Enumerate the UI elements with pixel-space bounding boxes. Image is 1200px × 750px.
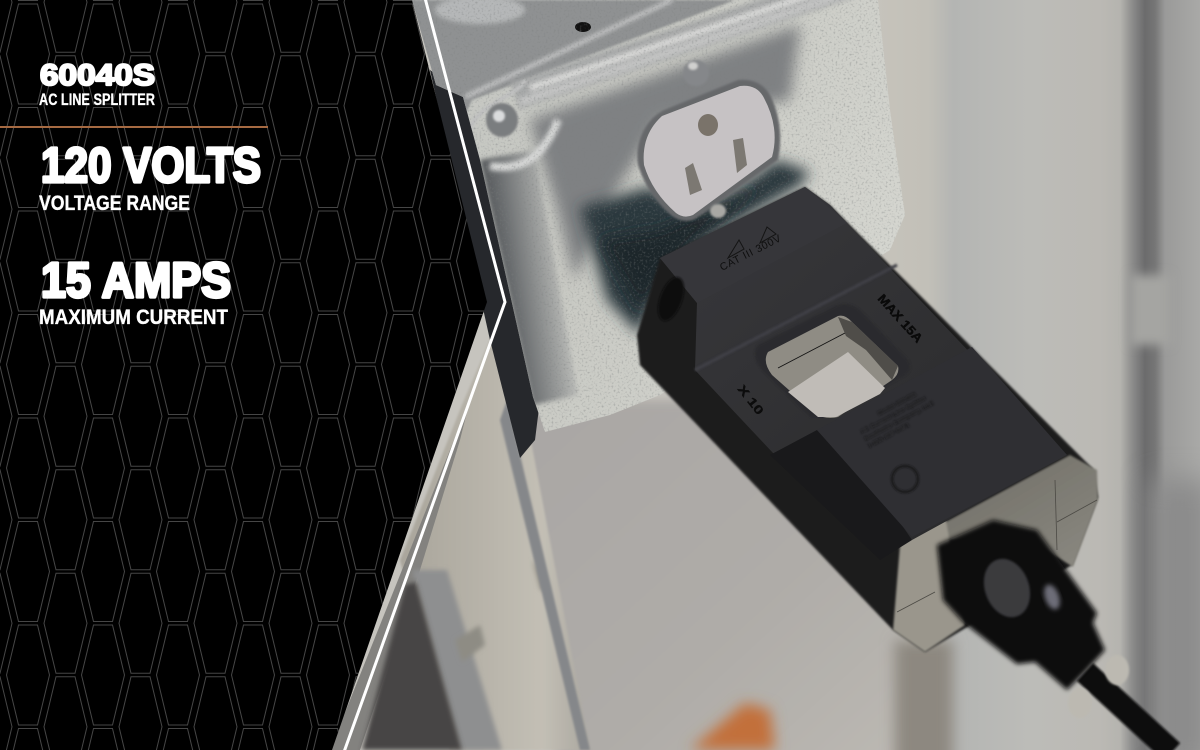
power plug and cord <box>937 520 1172 750</box>
beam edge <box>500 400 590 750</box>
device body <box>637 187 1098 652</box>
galvanized plate <box>432 0 905 432</box>
model heading <box>39 59 155 109</box>
current caption: MAXIMUM CURRENT <box>39 306 228 329</box>
model heading: 60040S <box>40 59 155 92</box>
right slot <box>733 138 747 173</box>
window opening <box>788 352 885 417</box>
dark side block <box>770 430 912 560</box>
lit corner band <box>490 120 558 167</box>
window rim <box>755 304 910 417</box>
beam face <box>400 305 590 750</box>
label small print <box>855 386 940 450</box>
cap seams <box>897 480 1097 612</box>
shadow band <box>412 570 502 750</box>
soot smudge <box>580 160 810 335</box>
label small print: Southwire Company, LLC <box>863 400 936 443</box>
plug body <box>937 520 1105 690</box>
voltage spec <box>39 139 261 215</box>
shaded center of plate <box>530 25 800 280</box>
inner metal wall <box>480 150 578 405</box>
dark gap triangle <box>362 582 462 750</box>
device text X 10: X 10 <box>735 382 767 418</box>
device text MAX 15A: MAX 15A <box>875 292 925 346</box>
plug ears <box>1105 655 1129 685</box>
orange divider <box>0 126 268 128</box>
translucent end cap upper <box>912 455 1098 567</box>
outlet screw <box>710 204 726 218</box>
front sloped face <box>660 187 847 303</box>
top screw <box>683 60 709 86</box>
current spec <box>39 254 231 329</box>
top face <box>660 187 1067 540</box>
left slot <box>685 163 702 195</box>
plug highlight <box>1041 582 1063 612</box>
window seam <box>778 333 845 368</box>
background wall <box>300 0 1200 750</box>
plug grip texture <box>976 552 1038 624</box>
black chevron panel <box>0 0 487 750</box>
label small print: 1-855-287-9473 <box>867 422 911 450</box>
receptacle face <box>644 86 775 217</box>
AC line splitter device <box>637 187 1098 652</box>
window silver walls <box>766 316 898 418</box>
orange object bottom <box>690 703 775 750</box>
photo: splitter plugged into outlet <box>300 0 1200 750</box>
ground hole <box>698 114 718 136</box>
outlet receptacle <box>637 80 780 221</box>
current spec: 15 AMPS <box>41 254 231 308</box>
certification mark <box>892 466 918 492</box>
strip beside chevron line <box>330 400 470 750</box>
window shadow wall <box>838 317 898 380</box>
hexagon pattern <box>0 0 487 750</box>
voltage caption: VOLTAGE RANGE <box>39 192 190 215</box>
upper flange <box>405 0 735 115</box>
spec panel background with hexagon pattern <box>0 0 487 750</box>
corner screw <box>486 103 518 137</box>
translucent end cap lower <box>893 515 965 652</box>
cord <box>1085 672 1172 750</box>
plate grain texture <box>400 0 920 440</box>
model subtitle: AC LINE SPLITTER <box>39 91 155 109</box>
label panel <box>817 347 1067 537</box>
warning triangles <box>728 227 776 258</box>
dark box side strip <box>430 70 540 458</box>
device text CAT III: CAT III 300V <box>718 232 784 274</box>
metal electrical box <box>400 0 920 440</box>
white chevron line <box>344 0 505 750</box>
voltage spec: 120 VOLTS <box>41 139 261 193</box>
ridge tube <box>465 0 850 102</box>
label small print: Model 60040S <box>877 391 918 418</box>
beam dent <box>455 625 485 662</box>
top reflection <box>435 0 525 24</box>
mounting hole <box>653 274 689 324</box>
top hole <box>575 22 591 32</box>
soot core <box>600 185 760 310</box>
crease <box>695 265 897 370</box>
blurred wall shapes <box>500 275 1200 750</box>
corner arc <box>470 80 525 130</box>
label small print: AC Current Line Splitter <box>859 395 928 436</box>
steel beam <box>330 305 590 750</box>
receptacle shadow side <box>637 80 780 221</box>
